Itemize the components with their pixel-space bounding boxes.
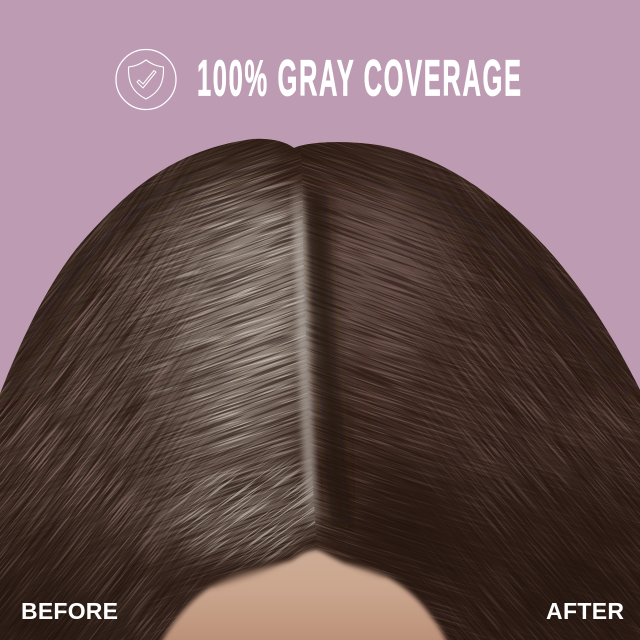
dark strands near the part — [0, 138, 316, 608]
colored hair shading on the after side — [328, 163, 474, 377]
dark band right of the part — [316, 190, 342, 525]
title: 100% GRAY COVERAGE — [197, 50, 521, 107]
steeper strands at the outer right — [410, 162, 640, 640]
gray regrowth shading on the before side — [40, 175, 325, 555]
icon: shield with check in circle — [116, 50, 176, 110]
mid tone strands — [301, 142, 640, 640]
label: after: AFTER — [546, 598, 624, 624]
steeper strands at the outer left — [0, 152, 224, 640]
forehead — [160, 550, 448, 640]
before side strand texture — [0, 138, 317, 640]
label: before: BEFORE — [21, 598, 118, 624]
bright steep strands above the hairline — [155, 443, 316, 574]
dark strands — [301, 142, 640, 640]
gray root line along the part — [297, 175, 313, 535]
photo: hair, before and after sides — [0, 138, 640, 640]
baby hairs at the hairline — [213, 538, 383, 584]
after side strand texture — [301, 142, 640, 640]
dark crown edge — [10, 148, 630, 390]
light strands near the part — [83, 139, 317, 634]
dark lower corners — [0, 430, 640, 640]
